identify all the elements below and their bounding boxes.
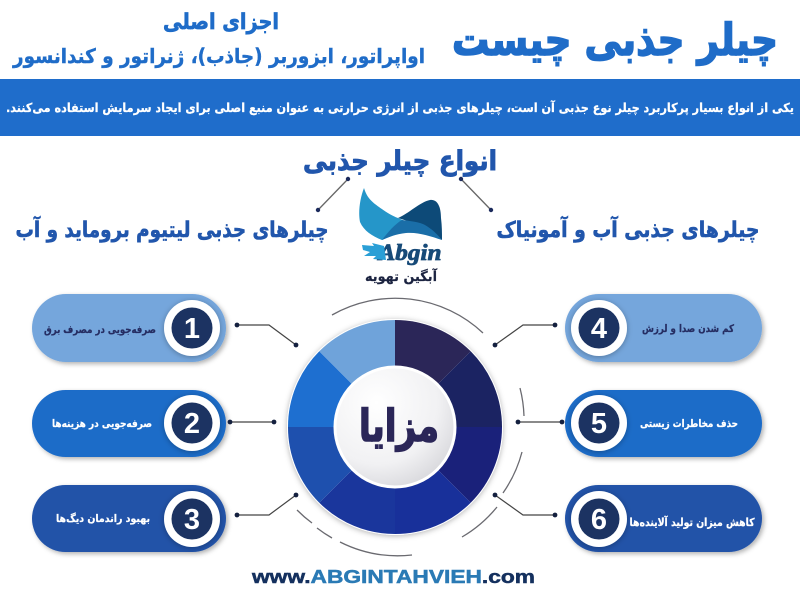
pill 2: صرفه‌جویی در هزینه‌ها bbox=[52, 418, 152, 430]
intro banner bbox=[0, 79, 800, 136]
connector: types to left bbox=[316, 177, 350, 212]
pill 4: 4 bbox=[591, 313, 607, 345]
pill 4: کم شدن صدا و لرزش bbox=[642, 323, 735, 335]
pill 6: کاهش میزان تولید آلاینده‌ها bbox=[630, 515, 755, 529]
pill 3: بهبود راندمان دیگ‌ها bbox=[56, 512, 150, 525]
type: water and ammonia: چیلرهای جذبی آب و آمونیاک bbox=[496, 215, 760, 243]
logo: Abgin bbox=[376, 240, 442, 265]
heading: chiller types: انواع چیلر جذبی bbox=[303, 146, 497, 177]
center label: مزایا bbox=[359, 401, 439, 452]
pill 6 bbox=[565, 485, 762, 552]
connector: types to right bbox=[459, 177, 493, 212]
pill 3 bbox=[32, 485, 226, 552]
connector lines bbox=[228, 323, 564, 517]
main parts heading and list bbox=[12, 10, 425, 69]
pill 5 bbox=[565, 390, 762, 457]
pill 4 bbox=[565, 294, 762, 362]
pill 1 bbox=[32, 294, 226, 362]
website footer: www. ABGINTAHVIEH .com bbox=[251, 567, 535, 587]
main parts heading and list: اواپراتور، ابزوربر (جاذب)، ژنراتور و کندانسور bbox=[12, 44, 425, 69]
logo bbox=[359, 188, 442, 285]
main parts heading and list: اجزای اصلی bbox=[163, 10, 279, 35]
pill 5: 5 bbox=[591, 408, 607, 440]
type: lithium bromide and water: چیلرهای جذبی لیتیوم بروماید و آب bbox=[16, 215, 328, 243]
outer arc strokes bbox=[297, 298, 524, 556]
donut chart: advantages bbox=[287, 319, 503, 535]
pill 2 bbox=[32, 390, 226, 457]
pill 3: 3 bbox=[184, 504, 200, 536]
pill 5: حذف مخاطرات زیستی bbox=[640, 418, 738, 430]
pill 1: 1 bbox=[184, 313, 200, 345]
logo: آبگین تهویه bbox=[365, 268, 437, 285]
pill 1: صرفه‌جویی در مصرف برق bbox=[44, 324, 156, 336]
pill 2: 2 bbox=[184, 408, 200, 440]
pill 6: 6 bbox=[591, 504, 607, 536]
